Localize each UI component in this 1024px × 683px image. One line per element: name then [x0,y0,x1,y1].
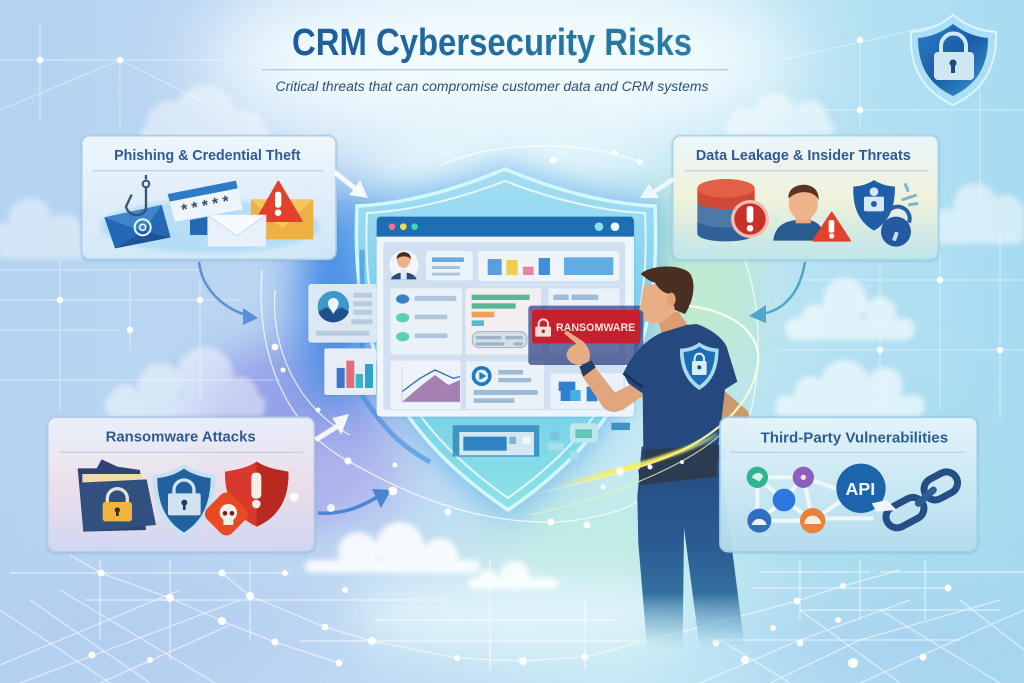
central glowing shield [347,160,666,522]
icon: locked folder [78,459,156,532]
icon: API badge: API [845,479,875,499]
hair [641,267,694,314]
ear [667,293,676,306]
blocks card [551,373,623,409]
title divider [262,69,728,70]
icon: network nodes [747,467,873,533]
technician figure [564,267,749,650]
icon: password field: ***** [180,193,232,219]
shirt [623,324,737,450]
arrow: data leakage to shield [640,177,675,198]
icon: broken chain [882,468,961,532]
panel: ransomware attacks [48,417,314,552]
energy swoosh [520,306,758,528]
icon: padlock shield [153,464,215,537]
icon: skull badge [202,489,251,539]
pointing arm [580,365,647,412]
left location card [308,284,377,343]
far arm [717,390,749,448]
icon: warning envelope [251,182,313,239]
subtitle: Critical threats that can compromise customer data and CRM systems [276,79,709,94]
arrow: phishing to shield [333,170,368,198]
clouds [0,85,1024,591]
dashboard window [377,217,634,417]
icon: shield and padlock [853,180,918,247]
panel: third-party vulnerabilities [720,417,977,552]
arrow: ransomware to shield [314,414,349,442]
arrow: data leakage curve [749,262,805,323]
left bar chart card [324,348,376,395]
neck [657,312,688,333]
watch [579,361,596,377]
icon: database with alert [697,179,769,241]
arrow: phishing curve [199,262,258,325]
arrow: ransomware curve [290,486,398,513]
back shield [680,342,719,390]
panel: data leakage and insider threats [673,136,938,260]
profile row [389,250,619,281]
hand [564,331,590,365]
heading: Third-Party Vulnerabilities [760,431,948,447]
ransomware alert: RANSOMWARE [556,322,635,334]
face [639,283,675,323]
icon: shield with padlock [911,15,996,105]
icon: white envelope [208,215,266,247]
belt [638,444,726,485]
trousers [637,447,745,650]
icon: API badge [836,464,886,513]
media card [466,361,544,409]
line chart card [391,361,461,409]
window frame [377,217,634,417]
title: CRM Cybersecurity Risks [292,22,692,64]
icon: red warning shield [225,462,288,527]
heading: Phishing & Credential Theft [114,148,301,164]
lower console strip [453,423,630,459]
icon: phishing envelope and hook [104,175,171,248]
ransomware alert [528,306,643,365]
orbit ring with nodes [261,146,758,525]
icon: password field [168,181,243,235]
lower network [0,555,1024,683]
side card [548,288,620,354]
heading: Ransomware Attacks [106,429,256,445]
icon: alert padlock [535,319,551,337]
bars card [466,288,541,354]
heading: Data Leakage & Insider Threats [696,148,911,164]
list card [391,288,462,354]
icon: insider with warning [773,185,850,241]
panel: phishing and credential theft [82,136,336,259]
title bar [377,217,634,237]
